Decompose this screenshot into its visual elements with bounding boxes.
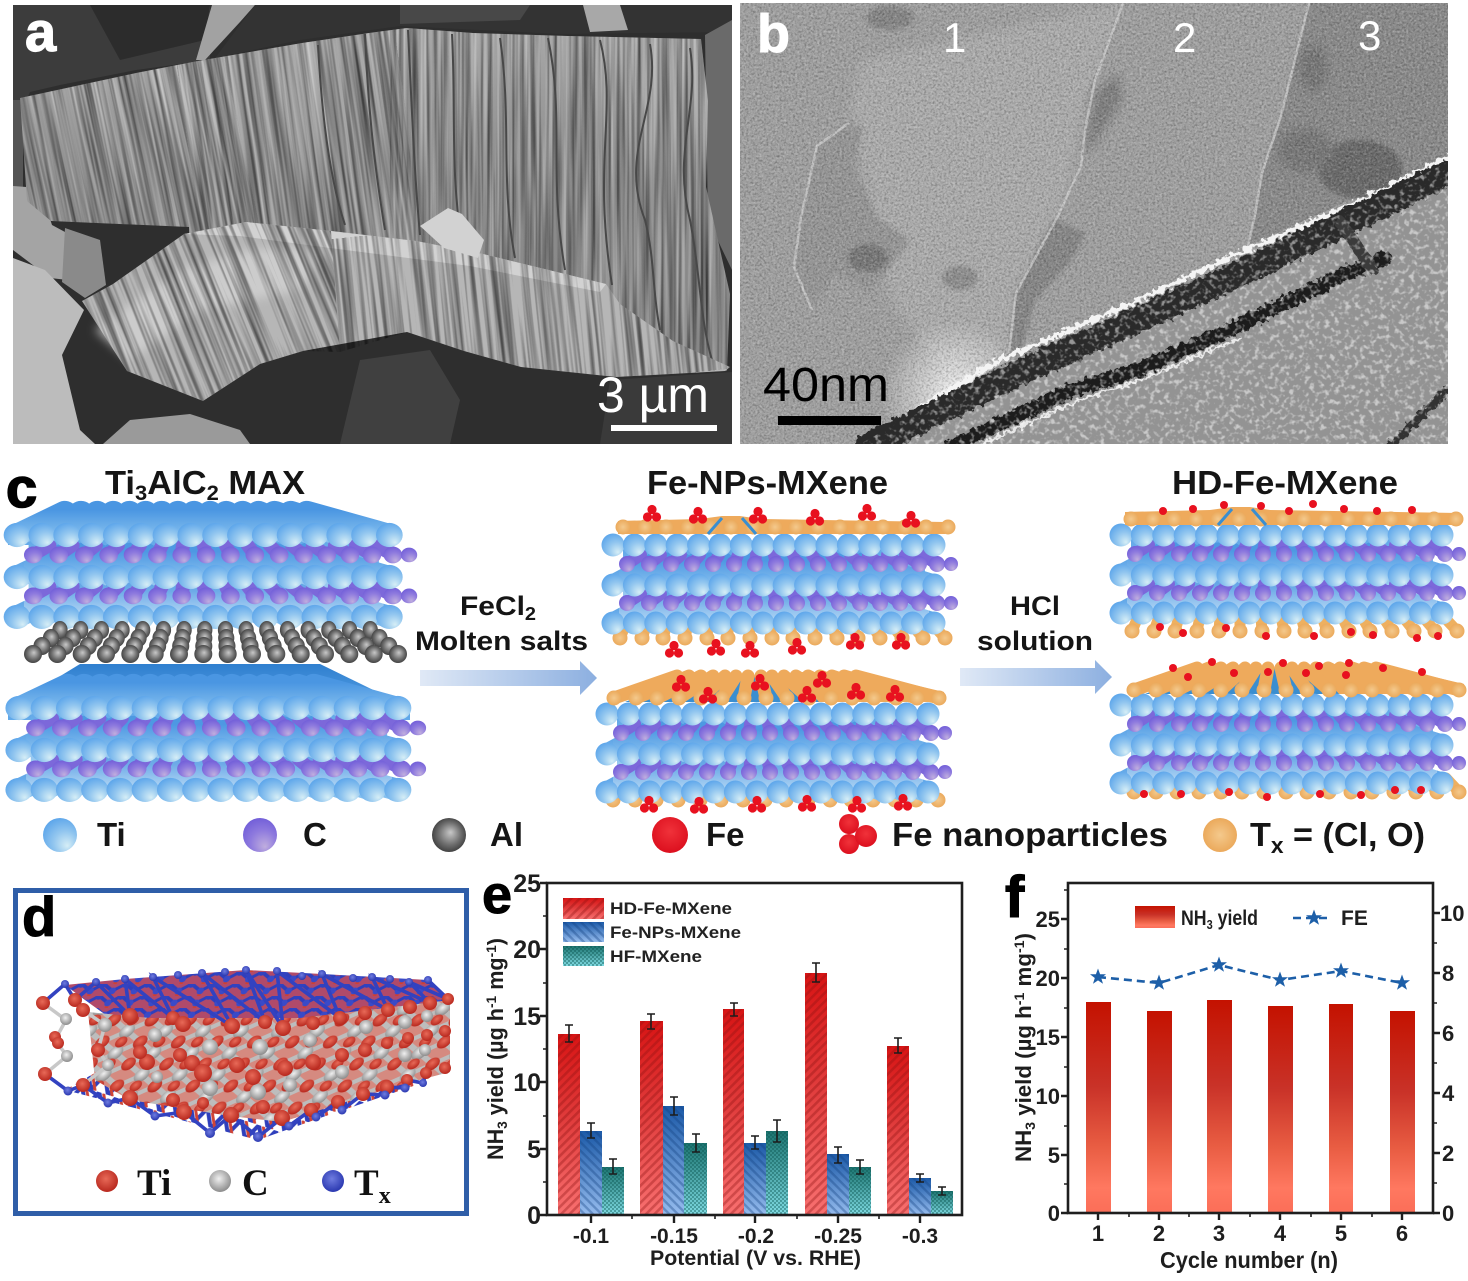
frame — [16, 890, 466, 1214]
yield bars — [1086, 1000, 1415, 1213]
x tick labels: -0.3 — [902, 1225, 938, 1248]
label f: f — [1005, 865, 1025, 930]
y axis title: -1 — [1011, 992, 1027, 1005]
x tick labels: 3 — [1213, 1221, 1225, 1246]
arrow and HCl label — [960, 591, 1112, 694]
legend for schematic: = (Cl, O) — [1284, 816, 1425, 853]
y tick labels — [513, 870, 541, 1230]
x tick labels — [573, 1225, 938, 1248]
legend for schematic: x — [1271, 833, 1284, 858]
legend for schematic: Ti — [97, 816, 126, 853]
x tick labels: -0.25 — [814, 1225, 862, 1248]
y axis title: ) — [483, 938, 508, 945]
left tick labels: 0 — [1048, 1201, 1060, 1226]
x tick labels: 5 — [1335, 1221, 1347, 1246]
sheet numbers: 2 — [1173, 14, 1196, 61]
y axis title: mg — [1011, 953, 1036, 993]
y axis title: -1 — [483, 945, 499, 957]
error bars — [565, 963, 946, 1195]
right tick labels: 8 — [1442, 961, 1454, 986]
bars HD-Fe-MXene — [558, 973, 909, 1215]
heading Ti3AlC2 MAX: MAX — [219, 464, 305, 501]
arrow and HCl label: solution — [977, 626, 1093, 656]
y axis title: -1 — [483, 996, 499, 1008]
legend: NH — [1181, 907, 1211, 930]
right tick labels — [1440, 901, 1464, 1226]
y axis title: NH — [1011, 1130, 1036, 1162]
y tick labels: 20 — [513, 936, 541, 964]
Fe nanoparticles — [640, 504, 920, 814]
x tick labels: 2 — [1153, 1221, 1165, 1246]
x axis title: Cycle number (n) — [1160, 1247, 1338, 1273]
left tick labels: 10 — [1036, 1084, 1060, 1109]
Ti3AlC2 structure — [4, 511, 426, 802]
heading Ti3AlC2 MAX: 2 — [207, 482, 219, 505]
label a: a — [25, 0, 57, 63]
heading HD-Fe-MXene: HD-Fe-MXene — [1172, 464, 1398, 501]
legend for lattice — [96, 1163, 391, 1209]
panel d: crystal structure — [16, 885, 466, 1214]
sheet numbers: 1 — [943, 14, 966, 61]
panel f: cycling stability chart — [1005, 865, 1464, 1273]
y tick labels: 15 — [513, 1003, 541, 1031]
y axis title: 3 — [494, 1121, 510, 1129]
right tick labels: 2 — [1442, 1141, 1454, 1166]
sheet numbers — [946, 21, 1380, 52]
legend for schematic: Fe nanoparticles — [892, 816, 1168, 853]
HD-Fe-MXene structure — [1110, 500, 1466, 801]
heading Ti3AlC2 MAX: Ti — [105, 464, 134, 501]
x tick labels — [1092, 1221, 1408, 1246]
y axis title: mg — [483, 957, 508, 996]
left tick labels: 20 — [1036, 966, 1060, 991]
legend: 3 — [1207, 917, 1213, 932]
right tick labels: 10 — [1440, 901, 1464, 926]
right tick labels: 0 — [1442, 1201, 1454, 1226]
right tick labels: 4 — [1442, 1081, 1455, 1106]
Fe-NPs-MXene structure — [596, 504, 958, 814]
y axis title: yield (µg h — [1011, 1005, 1036, 1122]
legend for lattice: T — [354, 1163, 379, 1204]
right tick labels: 6 — [1442, 1021, 1454, 1046]
mottled speckle over band and lower region — [850, 150, 1450, 445]
lower right mottled region — [902, 186, 1448, 444]
legend for schematic: C — [303, 816, 327, 853]
arrow and FeCl2 label: Molten salts — [415, 626, 588, 656]
y tick labels: 10 — [513, 1069, 541, 1097]
x tick labels: 4 — [1274, 1221, 1287, 1246]
y tick labels: 5 — [527, 1136, 541, 1164]
Al layer — [24, 621, 407, 663]
lattice — [36, 966, 454, 1142]
y axis title: ) — [1011, 933, 1036, 940]
legend: HD-Fe-MXene — [610, 899, 732, 918]
arrow and FeCl2 label: FeCl — [460, 591, 519, 621]
left tick labels: 5 — [1048, 1143, 1060, 1168]
left tick labels: 25 — [1036, 907, 1060, 932]
small crystal on flake — [420, 208, 484, 258]
left tick labels — [1036, 907, 1060, 1226]
y axis title: -1 — [1011, 940, 1027, 953]
single Fe atoms — [1140, 500, 1442, 801]
heading Ti3AlC2 MAX: AlC — [147, 464, 207, 501]
y tick labels: 0 — [527, 1202, 541, 1230]
legend for lattice: C — [242, 1163, 269, 1204]
scale bar 40 nm — [764, 368, 886, 425]
x axis title: Potential (V vs. RHE) — [650, 1247, 861, 1270]
legend: Fe-NPs-MXene — [610, 923, 741, 942]
legend — [563, 898, 741, 966]
panel a: SEM image of accordion MXene — [13, 5, 732, 444]
y axis title: NH — [483, 1128, 508, 1160]
axes — [1061, 883, 1440, 1220]
legend: HF-MXene — [610, 947, 702, 966]
label c: c — [6, 456, 37, 519]
legend for schematic: Fe — [706, 816, 745, 853]
scale bar 40 nm: 40nm — [763, 359, 889, 412]
x tick labels: -0.15 — [650, 1225, 698, 1248]
label d: d — [22, 885, 56, 948]
arrow and FeCl2 label — [415, 591, 597, 695]
legend: FE — [1341, 907, 1368, 930]
panel e: NH3 yield vs potential bar chart — [482, 865, 962, 1270]
heading Fe-NPs-MXene: Fe-NPs-MXene — [647, 464, 888, 501]
dark nanosheet edge band — [855, 156, 1450, 454]
legend for schematic: Al — [490, 816, 523, 853]
x tick labels: 1 — [1092, 1221, 1104, 1246]
heading Ti3AlC2 MAX: 3 — [135, 482, 147, 505]
axes — [540, 883, 962, 1223]
label b: b — [757, 4, 790, 64]
scale bar 3 µm — [598, 377, 717, 431]
panel c: synthesis schematic — [4, 456, 1466, 858]
y tick labels: 25 — [513, 870, 541, 898]
label e: e — [482, 865, 512, 925]
panel b: TEM image of few-layer sheets — [740, 3, 1450, 470]
legend — [1135, 906, 1368, 932]
y axis title: yield (µg h — [483, 1008, 508, 1121]
legend for lattice: Ti — [137, 1163, 171, 1204]
arrow and HCl label: HCl — [1010, 591, 1060, 621]
x tick labels: 6 — [1396, 1221, 1408, 1246]
legend for schematic: T — [1250, 816, 1270, 853]
y axis title: 3 — [1022, 1122, 1038, 1130]
legend: yield — [1213, 907, 1258, 930]
legend for lattice: x — [379, 1183, 391, 1209]
arrow and FeCl2 label: 2 — [525, 604, 536, 624]
bars Fe-NPs-MXene — [580, 1106, 931, 1215]
FE dashed line with stars — [1090, 956, 1410, 990]
legend for schematic — [43, 814, 1425, 858]
x tick labels: -0.2 — [738, 1225, 774, 1248]
bars HF-MXene — [602, 1131, 953, 1215]
sheet numbers: 3 — [1358, 12, 1381, 59]
left tick labels: 15 — [1036, 1025, 1060, 1050]
scale bar 3 µm: 3 µm — [597, 367, 709, 423]
x tick labels: -0.1 — [573, 1225, 609, 1248]
